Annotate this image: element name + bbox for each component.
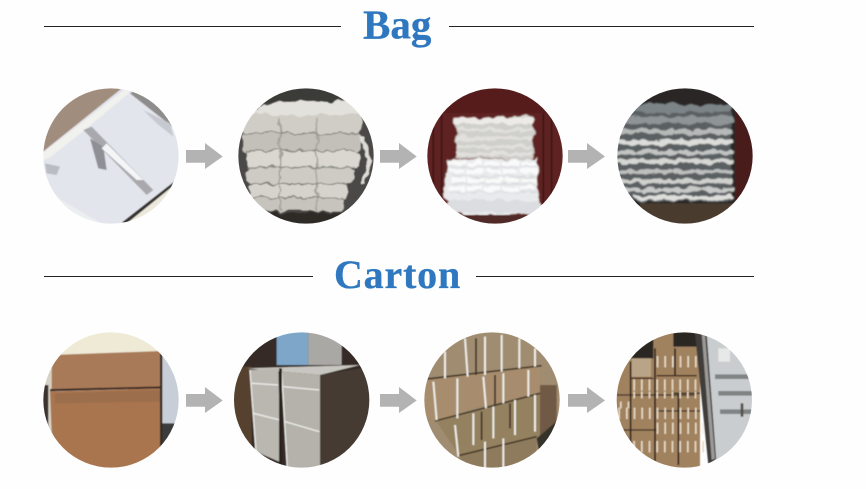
heading: Carton: Carton <box>334 252 461 297</box>
arrow <box>568 387 605 413</box>
arrow <box>186 143 223 169</box>
photo: stacked white cartons <box>234 332 370 468</box>
photo: stacked bags on a truck <box>613 85 757 228</box>
photo: strapped cartons in a container <box>420 330 563 473</box>
photo: pallet of white bags <box>238 88 374 224</box>
arrow <box>568 143 605 169</box>
heading: Bag: Bag <box>363 2 432 48</box>
photo: container loaded with white bags <box>423 85 567 228</box>
photo: single carton <box>40 330 183 473</box>
arrow <box>186 387 223 413</box>
photo: open bag of white powder <box>44 88 178 224</box>
photo: cartons beside open container door <box>616 332 752 468</box>
arrow <box>380 387 417 413</box>
arrow <box>380 143 417 169</box>
